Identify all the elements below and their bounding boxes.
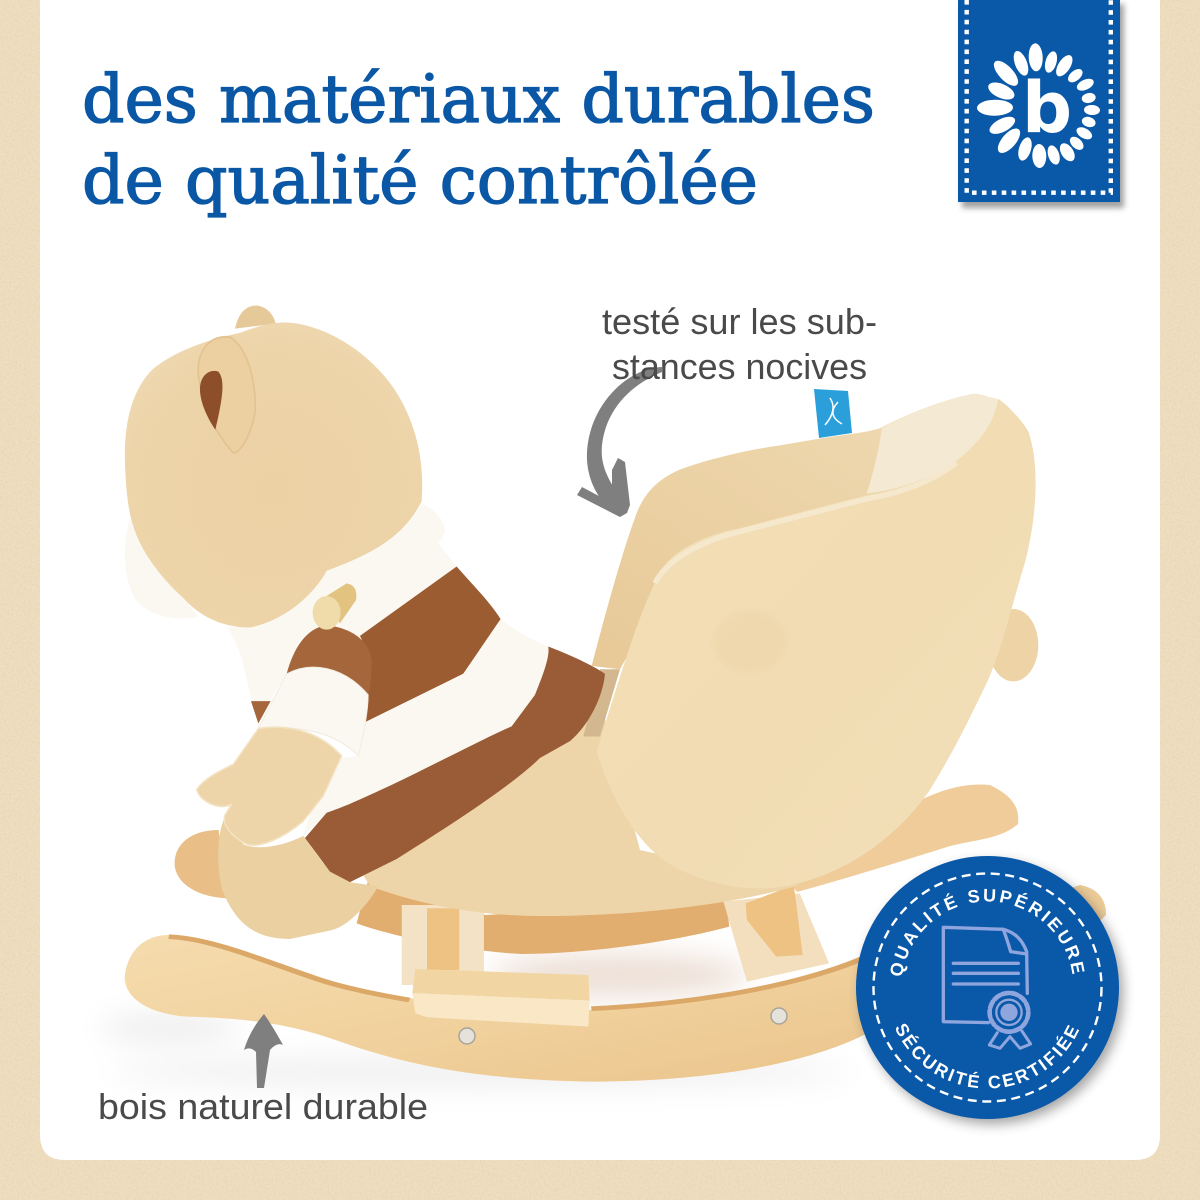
callout text <box>602 301 877 387</box>
icon: certificate <box>943 927 1031 1048</box>
back rocker under seat <box>357 880 729 954</box>
quality badge <box>854 854 1130 1132</box>
bear traced coordinates <box>125 306 605 939</box>
rocker tip behind badge <box>900 885 1106 960</box>
seat shell <box>597 399 1036 888</box>
left leg <box>402 905 484 985</box>
bear leg <box>218 817 378 939</box>
title: des matériaux durables <box>82 61 875 138</box>
ground shadows <box>100 953 850 1088</box>
bear ear <box>198 337 255 453</box>
sleeve brown <box>287 625 372 695</box>
seat worn patch <box>713 611 787 673</box>
badge bottom text: SÉCURITÉ CERTIFIÉE <box>896 1024 1080 1088</box>
callout: harmful substances <box>577 301 877 517</box>
callout text: stances nocives <box>612 346 867 387</box>
bear back ear <box>235 306 276 329</box>
wooden peg <box>313 583 356 630</box>
bear white muzzle <box>125 518 198 618</box>
shirt upper white <box>228 503 457 701</box>
screws <box>459 1008 787 1044</box>
footrest <box>412 969 590 1027</box>
callout: natural wood <box>98 1014 428 1127</box>
icon: sunflower petals <box>977 43 1100 168</box>
wooden base traced coordinates <box>125 830 867 1082</box>
seat back inner <box>592 394 1035 669</box>
right leg <box>723 885 829 982</box>
seat pocket shadow <box>583 669 620 736</box>
brand logo tag <box>958 0 1124 208</box>
callout label: bois naturel durable <box>98 1086 428 1127</box>
bear head <box>125 322 422 628</box>
shirt white stripe <box>303 619 549 836</box>
shirt brown hem <box>305 646 605 882</box>
badge top text: QUALITÉ SUPÉRIEURE <box>890 888 1085 976</box>
logo letter: b <box>1022 67 1072 149</box>
seat traced coordinates <box>583 394 1038 888</box>
back rocker left stub <box>175 830 227 898</box>
shirt small brown <box>251 701 271 723</box>
back rocker right arm <box>780 784 1018 892</box>
callout text: testé sur les sub- <box>602 301 877 342</box>
arrow: curved down to seat <box>577 367 662 517</box>
rocker top edge <box>169 937 867 1009</box>
title <box>82 61 875 219</box>
front rocker <box>125 935 867 1082</box>
product: rocking bear <box>100 306 1106 1088</box>
seat shell rim <box>655 463 957 583</box>
sleeve white <box>258 667 368 756</box>
blue label <box>814 389 852 438</box>
seat base <box>360 700 800 916</box>
seat tail <box>988 609 1038 681</box>
bear arm and hand <box>197 727 342 845</box>
shirt brown stripe <box>360 566 501 722</box>
arrow: up to rocker <box>244 1014 283 1088</box>
title: de qualité contrôlée <box>82 142 758 219</box>
seat cushion <box>867 394 998 494</box>
